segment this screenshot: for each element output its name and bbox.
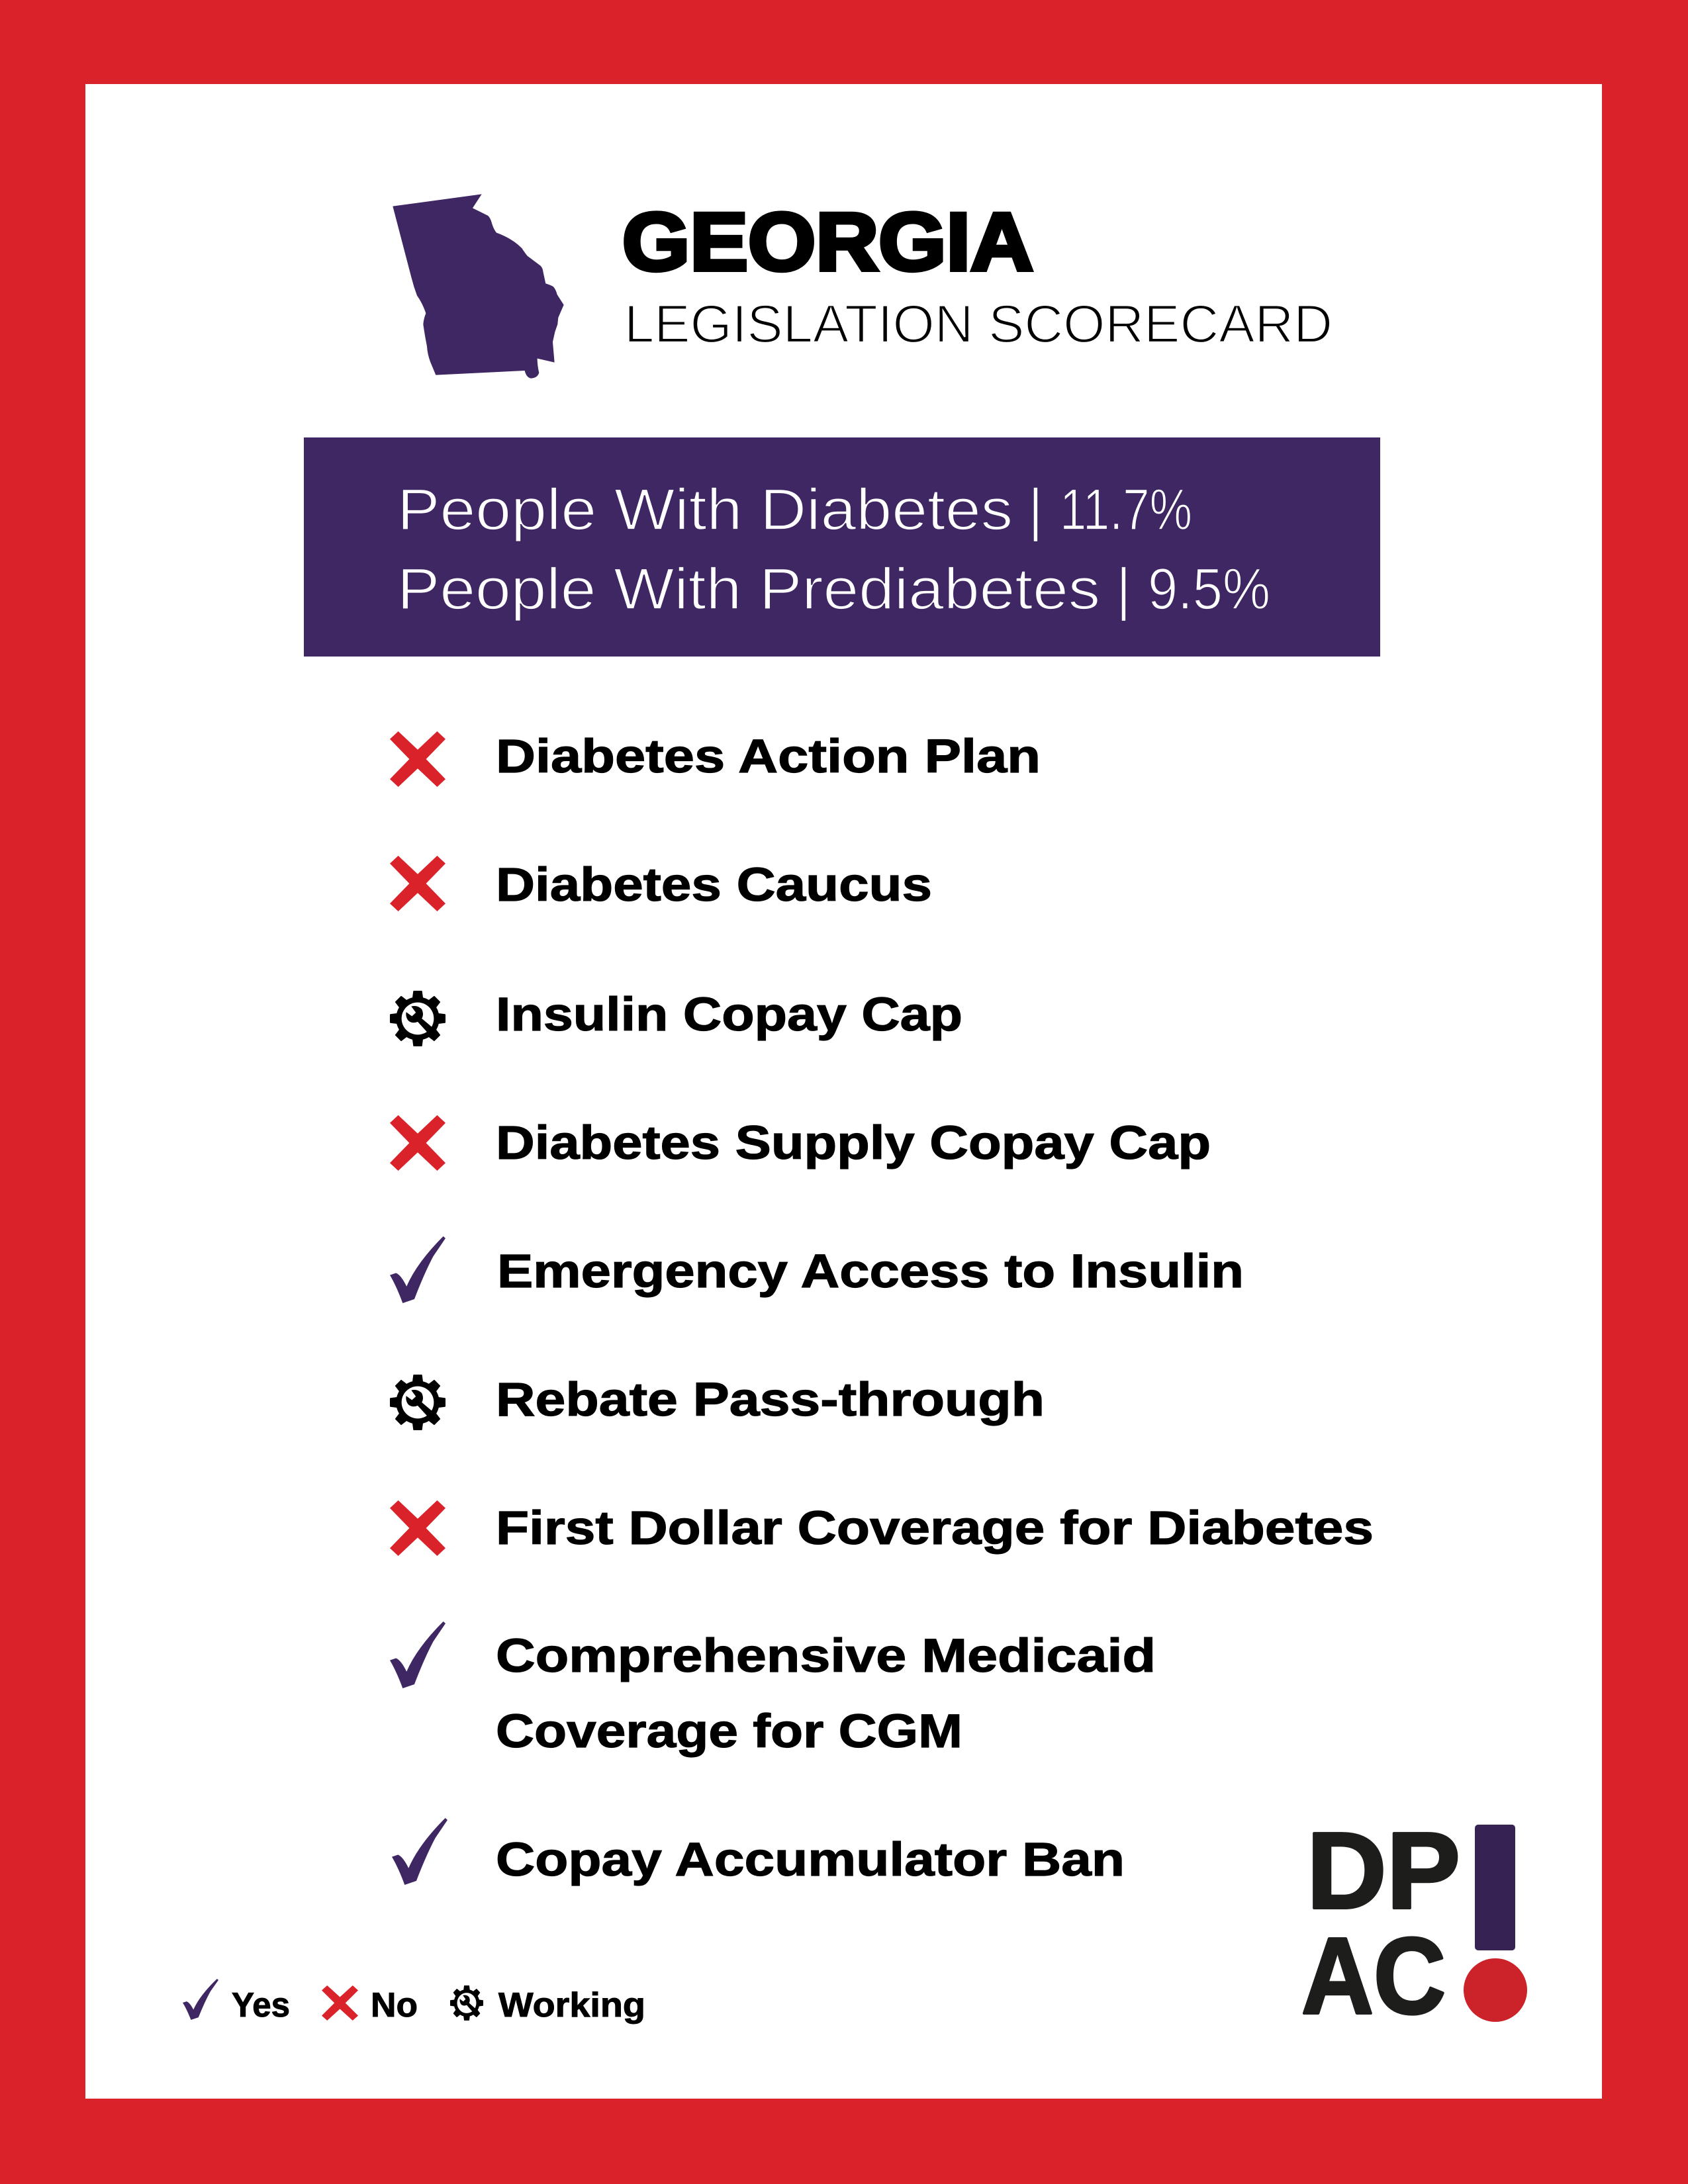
title: GEORGIA [622,197,1033,288]
item: Insulin Copay Cap: Insulin Copay Cap [496,989,962,1041]
legend label: Yes: Yes [232,1986,290,2025]
stat: people with diabetes: 11.7% [1060,477,1192,542]
legend [183,1979,645,2025]
title [622,197,1333,354]
logo exclamation dot [1464,1958,1527,2022]
item: Copay Accumulator Ban: Copay Accumulator Ban [496,1834,1125,1886]
item: Comprehensive Medicaid Coverage for CGM: Coverage for CGM [496,1706,962,1758]
item: Comprehensive Medicaid Coverage for CGM: Comprehensive Medicaid [496,1630,1156,1682]
DPAC logo: AC [1301,1915,1446,2036]
item: Diabetes Action Plan: Diabetes Action Plan [496,731,1041,783]
icon: yes [392,1818,447,1885]
item: Comprehensive Medicaid Coverage for CGM [496,1630,1156,1758]
legend label: Working: Working [498,1986,645,2025]
item: Diabetes Caucus: Diabetes Caucus [496,859,932,911]
legend label: No: No [371,1986,418,2025]
stat: people with diabetes: | [1028,477,1043,542]
item: Rebate Pass-through: Rebate Pass-through [496,1374,1045,1426]
panel: diabetes statistics [304,437,1380,657]
icon: no [390,1500,445,1556]
DPAC logo: DP [1307,1810,1460,1931]
logo exclamation bar [1475,1825,1515,1950]
stat: people with prediabetes: 9.5% [1148,556,1270,621]
scorecard list [390,731,1374,1886]
item: First Dollar Coverage for Diabetes: First Dollar Coverage for Diabetes [496,1502,1374,1555]
item: Diabetes Supply Copay Cap: Diabetes Supply Copay Cap [496,1117,1211,1169]
subtitle: LEGISLATION SCORECARD [624,295,1333,354]
stat: people with diabetes: People With Diabetes [397,477,1013,542]
icon: no [390,1115,445,1171]
icon: no [390,856,445,911]
icon: yes [390,1236,445,1303]
DPAC logo [1301,1810,1527,2036]
icon: legend no [322,1985,358,2021]
icon: no [390,731,445,787]
icon: yes [390,1621,445,1688]
icon: working [390,1375,445,1430]
icon: legend yes [183,1979,218,2020]
icon: Georgia state map [393,194,564,379]
stat: people with prediabetes: People With Prediabetes [397,556,1100,621]
icon: working [390,991,445,1046]
item: Emergency Access to Insulin: Emergency Access to Insulin [497,1246,1244,1298]
icon: legend working [450,1985,483,2021]
stat: people with prediabetes: | [1116,556,1131,621]
